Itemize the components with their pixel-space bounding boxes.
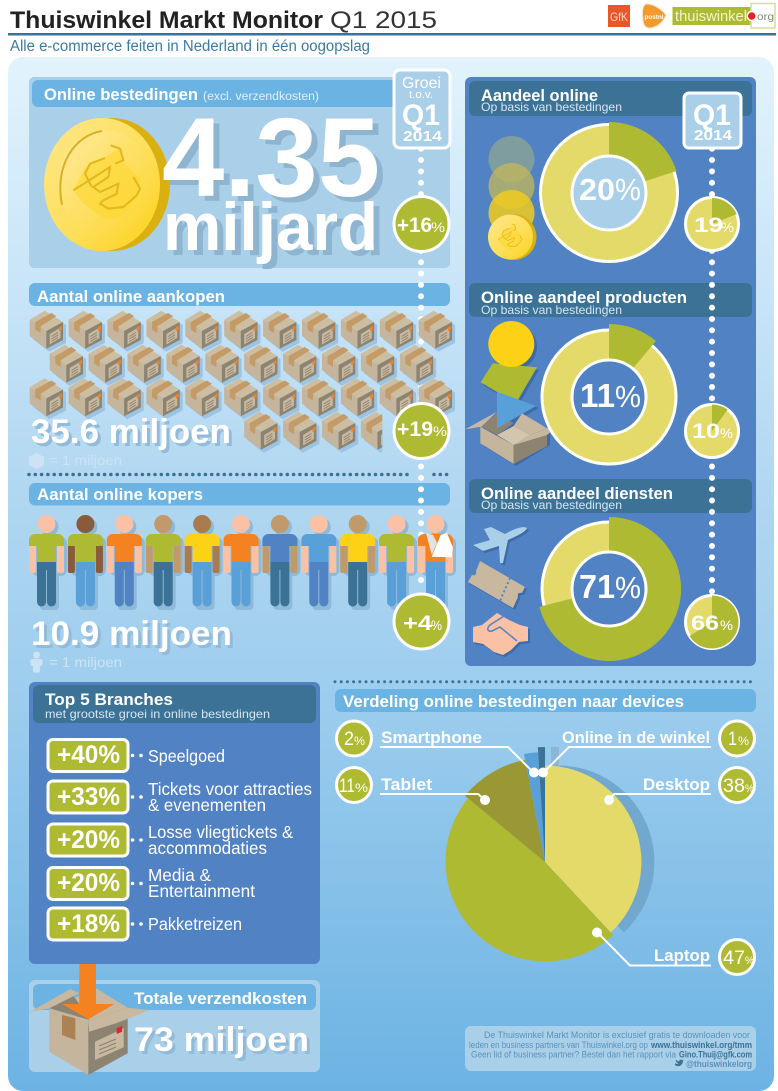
donut: aandeel online 20% xyxy=(540,122,678,262)
badge: 47%: 47 xyxy=(723,948,745,969)
footer note: Geen lid of business partner? Bestel dan het rapport via xyxy=(471,1050,677,1060)
callout: desktop: Desktop xyxy=(643,775,710,794)
header: aandeel online: Op basis van bestedingen xyxy=(481,100,622,114)
row: pakketreizen xyxy=(48,908,242,940)
header: online aandeel diensten xyxy=(469,479,752,513)
badge: 11%: % xyxy=(355,781,368,795)
person 2 xyxy=(68,515,106,610)
small donut: 19%: 19 xyxy=(694,214,723,237)
legend: box = 1 miljoen xyxy=(29,453,122,469)
donut: producten 11%: % xyxy=(615,379,641,414)
callout: tablet: Tablet xyxy=(381,775,432,794)
section bar: aantal online aankopen: Aantal online aankopen xyxy=(37,287,225,306)
section bar: aantal online aankopen xyxy=(29,283,450,306)
row: tickets: Tickets voor attracties xyxy=(148,779,312,799)
badge: +16%: +16 xyxy=(397,214,432,237)
row: speelgoed xyxy=(48,740,225,772)
footer note: De Thuiswinkel Markt Monitor is exclusief gratis te downloaden voor xyxy=(484,1030,750,1041)
parcels row 3 xyxy=(30,378,455,419)
slice: online in de winkel 1% xyxy=(538,747,545,862)
icon: fading coins xyxy=(488,136,536,260)
logo: Thuiswinkel.org: org xyxy=(757,11,774,23)
callout: laptop xyxy=(592,928,711,966)
panel: totale verzendkosten xyxy=(29,964,320,1075)
number: 35.6 miljoen: 35.6 miljoen xyxy=(31,413,231,451)
logo: GfK: GfK xyxy=(610,10,628,24)
row: media: +20% xyxy=(57,869,120,897)
row: media xyxy=(48,865,255,901)
row: pakketreizen: Pakketreizen xyxy=(148,914,242,934)
badge: 2%: % xyxy=(354,734,365,748)
growth tab: groei t.o.v. Q1 2014 xyxy=(394,70,450,148)
badge: 38%: % xyxy=(745,783,754,795)
Q1 2014 tab: 2014 xyxy=(694,127,733,144)
dotted growth line right xyxy=(709,149,715,592)
logos xyxy=(608,4,775,28)
dotted growth line left xyxy=(418,149,424,590)
footer note: @thuiswinkelorg xyxy=(686,1059,752,1070)
panel: top 5 branches xyxy=(29,682,320,964)
small donut: 10% xyxy=(686,404,738,458)
row: pakketreizen: +18% xyxy=(57,910,120,938)
panel: online bestedingen xyxy=(29,77,450,268)
row: tickets xyxy=(48,779,312,815)
badge: 47% xyxy=(720,940,754,974)
number: 10.9 miljoen: 10.9 miljoen xyxy=(31,615,232,653)
donut: aandeel online 20%: 20 xyxy=(579,172,615,207)
panel: online share xyxy=(465,77,756,666)
row: vliegtickets: Losse vliegtickets & xyxy=(148,822,293,842)
growth tab: groei t.o.v. Q1 2014: Q1 xyxy=(402,99,440,132)
header: totale verzendkosten xyxy=(33,984,316,1010)
icon: small coin xyxy=(488,214,536,260)
header bar: online bestedingen: (excl. verzendkosten) xyxy=(203,91,319,103)
person 7 xyxy=(262,515,300,610)
badge: 1%: % xyxy=(738,734,749,748)
slice: desktop 38% xyxy=(545,766,641,932)
pictogram: parcels = 35.6 million xyxy=(30,311,455,453)
footer note xyxy=(465,1026,756,1071)
header bar: online bestedingen: Online bestedingen xyxy=(44,85,198,104)
icon: ticket xyxy=(468,561,525,608)
parcels row 1 xyxy=(30,311,455,352)
icon: product shapes in box xyxy=(465,321,564,466)
number: 73 miljoen: 73 miljoen xyxy=(134,1021,309,1059)
badge: +19% xyxy=(394,404,449,458)
badge: 2% xyxy=(336,721,372,756)
callout: laptop: Laptop xyxy=(654,946,710,965)
person 3 xyxy=(107,515,145,610)
person 1 xyxy=(29,515,67,610)
Q1 2014 tab: Q1 xyxy=(693,99,731,132)
person 10 xyxy=(379,515,417,610)
small donut: 66%: 66 xyxy=(691,612,719,635)
row: vliegtickets xyxy=(48,822,293,858)
donut: producten 11%: 11 xyxy=(580,377,615,414)
icon: twitter bird xyxy=(675,1060,684,1066)
slice: tablet 11% xyxy=(465,760,545,862)
badge: 38%: 38 xyxy=(723,776,745,797)
footer note: leden en business partners van Thuiswinkel.org op xyxy=(469,1040,648,1051)
badge: 11% xyxy=(336,768,372,802)
growth tab: groei t.o.v. Q1 2014: t.o.v. xyxy=(409,89,433,101)
small donut: 19% xyxy=(686,198,738,250)
section bar: aantal online kopers: Aantal online kopers xyxy=(37,485,203,504)
person 4 xyxy=(146,515,184,610)
callout: smartphone: Smartphone xyxy=(381,728,482,747)
row: vliegtickets: accommodaties xyxy=(148,838,267,858)
header bar: online bestedingen xyxy=(32,80,450,107)
badge: +16%: % xyxy=(431,219,445,235)
pie chart: devices xyxy=(445,747,654,962)
row: speelgoed: Speelgoed xyxy=(148,746,225,766)
callout: online in de winkel: Online in de winkel xyxy=(562,728,710,747)
badge: +4% xyxy=(394,594,449,649)
slice: smartphone 2% xyxy=(524,752,545,862)
small donut: 10%: 10 xyxy=(692,420,720,443)
legend: person = 1 miljoen xyxy=(30,652,122,672)
title: Thuiswinkel Markt Monitor xyxy=(10,7,323,34)
callout: smartphone xyxy=(380,728,539,778)
icon: gold euro coin xyxy=(44,118,170,251)
small donut: 66% xyxy=(686,596,738,649)
badge: 38% xyxy=(720,768,754,802)
person 6 xyxy=(224,515,262,610)
row: vliegtickets: +20% xyxy=(57,826,120,854)
donut: aandeel online 20%: % xyxy=(615,172,641,207)
row: tickets: & evenementen xyxy=(148,795,266,815)
logo: Thuiswinkel.org xyxy=(672,4,775,28)
badge: +4%: +4 xyxy=(403,612,432,635)
header: top 5 branches: met grootste groei in online bestedingen xyxy=(45,707,270,721)
person 11 with sling xyxy=(418,515,456,610)
parcels row 4 xyxy=(244,412,397,453)
logo: PostNL xyxy=(642,4,666,28)
callout: tablet xyxy=(380,775,490,805)
badge: +4%: % xyxy=(431,617,442,633)
small donut: 19%: % xyxy=(721,219,734,235)
row: media: Entertainment xyxy=(148,881,255,901)
small donut: 66%: % xyxy=(720,617,733,633)
badge: 1% xyxy=(720,721,754,756)
badge: +16% xyxy=(394,196,449,252)
badge: 2%: 2 xyxy=(344,729,354,750)
header: online aandeel producten: Op basis van bestedingen xyxy=(481,303,622,317)
row: speelgoed: +40% xyxy=(57,741,120,769)
badge: 1%: 1 xyxy=(728,729,737,750)
header: aandeel online xyxy=(469,81,752,116)
icon: open parcel with arrow xyxy=(29,964,150,1075)
badge: +19%: +19 xyxy=(397,418,433,441)
person 9 xyxy=(340,515,378,610)
section bar: verdeling devices: Verdeling online bestedingen naar devices xyxy=(343,692,684,711)
header: online aandeel producten xyxy=(469,283,752,317)
donut: diensten 71% xyxy=(539,517,681,661)
row: media: Media & xyxy=(148,865,211,885)
subtitle: Alle e-commerce feiten in Nederland in één oogopslag xyxy=(10,38,370,55)
callout: online in de winkel xyxy=(538,728,711,778)
small donut: 10%: % xyxy=(720,425,733,441)
header: top 5 branches: Top 5 Branches xyxy=(45,690,173,709)
big word miljard: miljard xyxy=(163,189,378,265)
icon: handshake xyxy=(473,613,528,655)
callout: desktop xyxy=(604,775,711,805)
growth tab: groei t.o.v. Q1 2014: 2014 xyxy=(403,128,443,145)
title: Q1 2015 xyxy=(330,7,437,34)
big number 4.35: 4.35 xyxy=(162,95,380,220)
slice: laptop 47% xyxy=(445,798,613,962)
donut: producten 11% xyxy=(542,324,676,464)
header: totale verzendkosten: Totale verzendkosten xyxy=(134,989,307,1008)
person 8 xyxy=(301,515,339,610)
badge: 47%: % xyxy=(745,955,754,967)
badge: 11%: 11 xyxy=(339,776,355,797)
section bar: verdeling devices xyxy=(335,689,756,712)
donut: diensten 71%: % xyxy=(615,570,641,605)
section bar: aantal online kopers xyxy=(29,483,450,506)
icon: airplane xyxy=(473,527,527,563)
header: online aandeel diensten: Op basis van bestedingen xyxy=(481,498,622,512)
legend: box = 1 miljoen: = 1 miljoen xyxy=(49,453,122,468)
logo: Thuiswinkel.org: thuiswinkel xyxy=(675,8,747,25)
arrow: orange down xyxy=(62,964,114,1019)
footer note: www.thuiswinkel.org/tmm xyxy=(650,1040,752,1051)
growth tab: groei t.o.v. Q1 2014: Groei xyxy=(402,75,441,92)
donut: diensten 71%: 71 xyxy=(579,568,615,605)
pictogram: people = 10.9 million xyxy=(29,515,456,610)
footer note: Gino.Thuij@gfk.com xyxy=(679,1050,752,1060)
legend: person = 1 miljoen: = 1 miljoen xyxy=(49,655,122,670)
badge: +19%: % xyxy=(433,423,447,439)
Q1 2014 tab xyxy=(684,93,741,148)
header: aandeel online: Aandeel online xyxy=(481,86,598,105)
row: tickets: +33% xyxy=(57,783,120,811)
person 5 xyxy=(185,515,223,610)
header: online aandeel producten: Online aandeel producten xyxy=(481,288,687,307)
header: top 5 branches xyxy=(33,685,316,723)
header: online aandeel diensten: Online aandeel diensten xyxy=(481,484,673,503)
parcels row 2 xyxy=(50,345,436,386)
logo: GfK xyxy=(608,5,630,27)
logo: PostNL: postnl xyxy=(644,14,664,21)
